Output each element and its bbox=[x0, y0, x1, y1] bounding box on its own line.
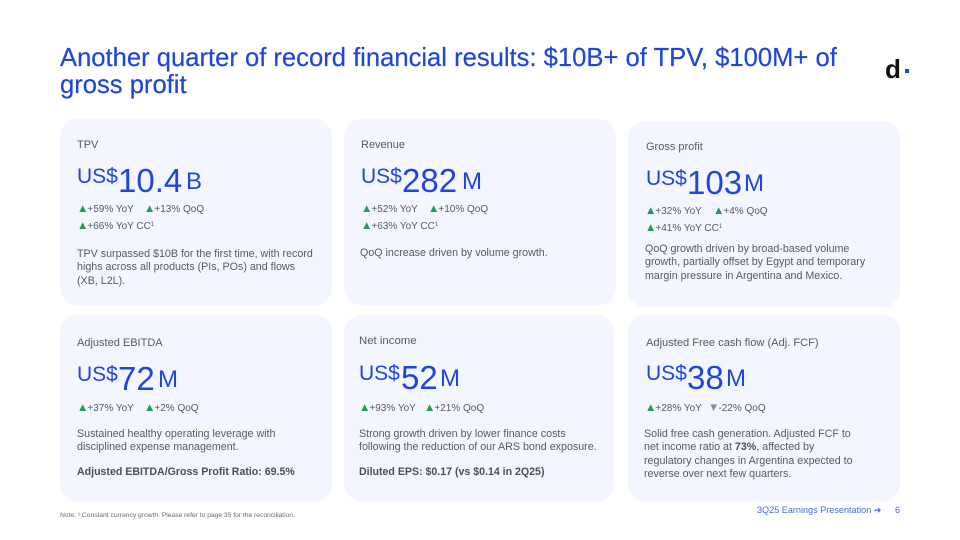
label: Adjusted free cash flow: Adjusted Free cash flow (Adj. FCF) bbox=[646, 337, 819, 349]
growth: YoY and QoQ: ▲+37% YoY ▲+2% QoQ bbox=[77, 402, 199, 414]
description bbox=[359, 428, 597, 453]
description: QoQ growth driven by broad-based volume bbox=[645, 243, 849, 255]
metric: Gross profit value: M bbox=[744, 170, 764, 197]
panel: Revenue bbox=[344, 119, 616, 305]
description: disciplined expense management. bbox=[77, 441, 239, 453]
footer: presentation name: 3Q25 Earnings Presentation ➜ bbox=[757, 505, 881, 515]
metric: Adjusted EBITDA value bbox=[77, 360, 178, 397]
description: TPV surpassed $10B for the first time, with record bbox=[77, 248, 313, 260]
panel: Gross profit bbox=[628, 121, 900, 307]
description: Sustained healthy operating leverage with bbox=[77, 428, 275, 440]
panel: Adjusted free cash flow bbox=[628, 315, 900, 501]
label: TPV: TPV bbox=[77, 139, 98, 151]
metric: TPV value: B bbox=[186, 168, 202, 195]
description: margin pressure in Argentina and Mexico. bbox=[645, 270, 842, 282]
title: gross profit bbox=[60, 71, 187, 99]
growth: YoY and QoQ: ▲+52% YoY ▲+10% QoQ bbox=[361, 203, 488, 215]
label: Adjusted EBITDA: Adjusted EBITDA bbox=[77, 337, 163, 349]
metric: Adjusted FCF value: 38 bbox=[687, 359, 724, 396]
description: growth, partially offset by Egypt and temporary bbox=[645, 256, 865, 268]
growth: YoY and QoQ: ▲+93% YoY ▲+21% QoQ bbox=[359, 402, 484, 414]
footer: page number: 6 bbox=[895, 505, 900, 515]
growth: YoY CC: ▲+66% YoY CC1 bbox=[77, 220, 154, 232]
growth: YoY CC: ▲+41% YoY CC1 bbox=[645, 222, 722, 234]
metric: Revenue value bbox=[361, 162, 482, 199]
description bbox=[77, 428, 275, 453]
growth: YoY and QoQ: ▲+32% YoY ▲+4% QoQ bbox=[645, 205, 768, 217]
metric: Revenue value: M bbox=[462, 168, 482, 195]
metric: Net income value: 52 bbox=[401, 359, 438, 396]
metric: TPV value: 10.4 bbox=[118, 162, 182, 199]
description: Solid free cash generation. Adjusted FCF to bbox=[644, 428, 851, 440]
metric: Adjusted FCF value: M bbox=[726, 365, 746, 392]
metric: Gross profit value bbox=[646, 164, 764, 201]
ratio note: Adjusted EBITDA/Gross Profit Ratio: 69.5% bbox=[77, 466, 295, 478]
metric: Adjusted EBITDA value: 72 bbox=[118, 360, 155, 397]
title bbox=[60, 44, 837, 99]
metric: TPV value: US$ bbox=[77, 165, 118, 188]
description: following the reduction of our ARS bond exposure. bbox=[359, 441, 597, 453]
metric: Net income value: M bbox=[440, 365, 460, 392]
title: Another quarter of record financial results: $10B+ of TPV, $100M+ of bbox=[60, 44, 837, 72]
footnote: Note: ¹ Constant currency growth. Please refer to page 35 for the reconciliation. bbox=[60, 512, 295, 519]
metric: Net income value: US$ bbox=[359, 362, 400, 385]
metric: Adjusted EBITDA value: M bbox=[158, 366, 178, 393]
metric: Gross profit value: 103 bbox=[687, 164, 742, 201]
description: Strong growth driven by lower finance costs bbox=[359, 428, 566, 440]
logo: d bbox=[885, 54, 901, 84]
description: regulatory changes in Argentina expected to bbox=[644, 455, 853, 467]
panel: Net income bbox=[344, 315, 614, 501]
metric: Adjusted EBITDA value: US$ bbox=[77, 363, 118, 386]
growth: YoY and QoQ: ▲+59% YoY ▲+13% QoQ bbox=[77, 203, 204, 215]
growth: YoY CC: ▲+63% YoY CC1 bbox=[361, 220, 438, 232]
metric: Adjusted FCF value: US$ bbox=[646, 362, 687, 385]
panel: TPV bbox=[60, 119, 332, 305]
EPS note: Diluted EPS: $0.17 (vs $0.14 in 2Q25) bbox=[359, 466, 544, 478]
label: Gross profit: Gross profit bbox=[646, 141, 703, 153]
description bbox=[645, 243, 866, 282]
metric: Adjusted FCF value bbox=[646, 359, 746, 396]
metric: Net income value bbox=[359, 359, 460, 396]
description: (XB, L2L). bbox=[77, 275, 125, 287]
description: QoQ increase driven by volume growth. bbox=[360, 247, 548, 259]
metric: TPV value bbox=[77, 162, 202, 199]
label: Net income: Net income bbox=[359, 335, 417, 347]
description: net income ratio at 73%, affected by bbox=[644, 441, 814, 453]
description: highs across all products (PIs, POs) and flows bbox=[77, 261, 295, 273]
panel: Adjusted EBITDA bbox=[60, 315, 332, 501]
label: Revenue: Revenue bbox=[361, 139, 405, 151]
description bbox=[644, 428, 853, 480]
metric: Gross profit value: US$ bbox=[646, 167, 687, 190]
growth: YoY and QoQ: ▲+28% YoY ▼-22% QoQ bbox=[645, 402, 766, 414]
metric: Revenue value: US$ bbox=[361, 165, 402, 188]
description bbox=[77, 248, 313, 287]
metric: Revenue value: 282 bbox=[402, 162, 457, 199]
description: reverse over next few quarters. bbox=[644, 468, 791, 480]
